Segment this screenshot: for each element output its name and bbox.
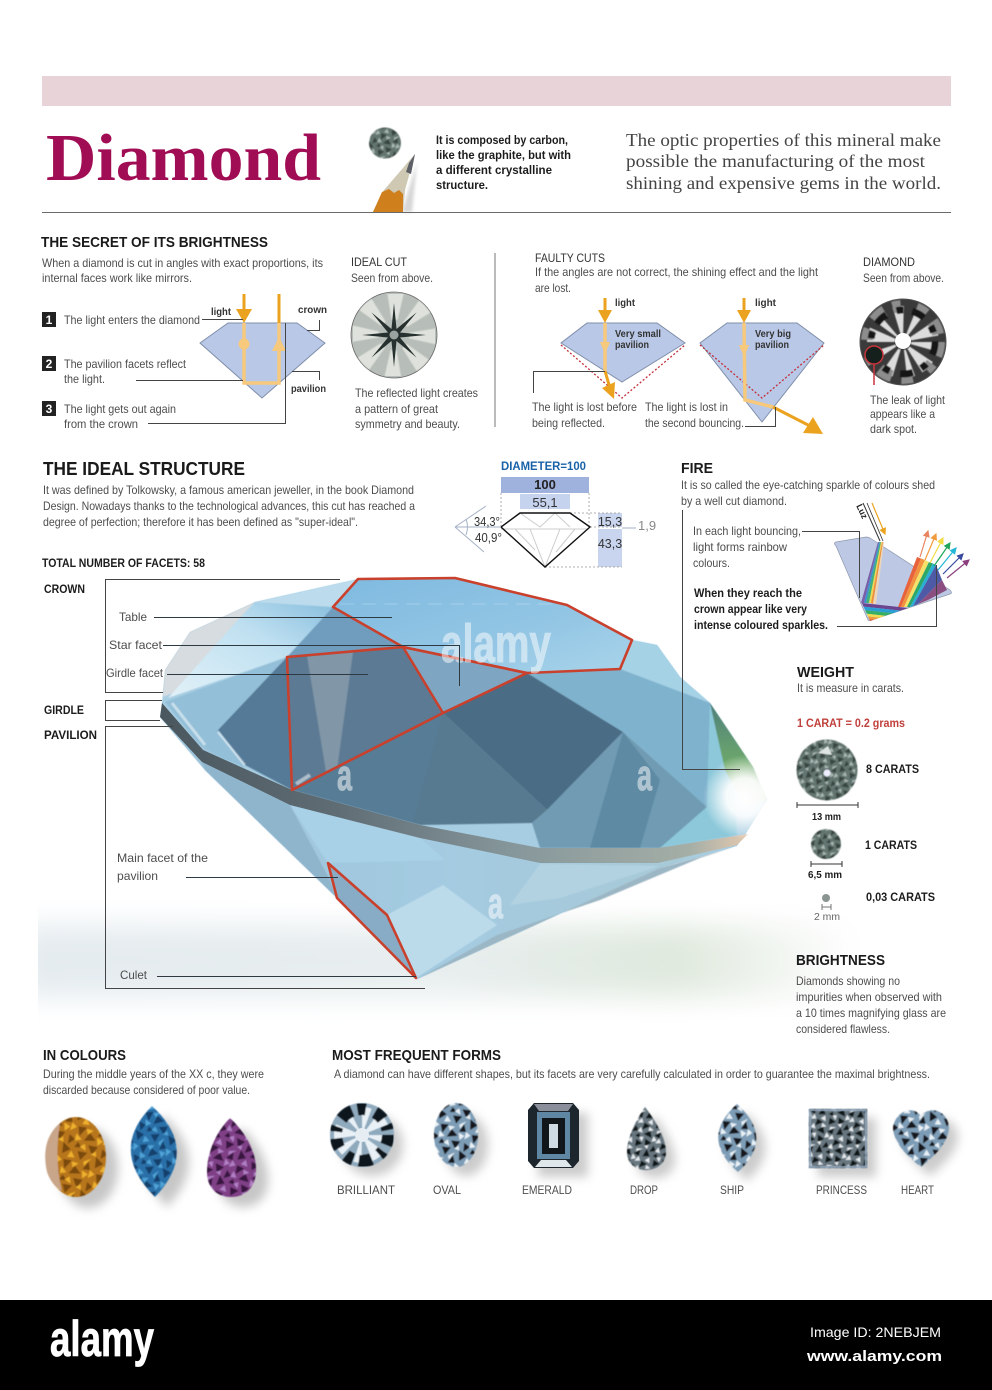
- panel: weight: [796, 664, 935, 923]
- diagram: light path in ideal cut: pavilion: [291, 383, 326, 395]
- callouts: facets: Culet: [120, 968, 148, 982]
- footer bar: alamy: [50, 1311, 154, 1367]
- header band: [42, 76, 951, 106]
- panel: fire: [681, 460, 969, 632]
- intro text: [626, 130, 941, 193]
- diagram: proportions: 100: [534, 477, 556, 492]
- panel: brightness: a 10 times magnifying glass are: [796, 1006, 946, 1020]
- diagram: very small pavilion: pavilion: [615, 339, 649, 351]
- callouts: facets: pavilion: [117, 869, 158, 883]
- intro text: The optic properties of this mineral make: [626, 130, 941, 150]
- carbon note: like the graphite, but with: [436, 148, 571, 162]
- watermark: a: [337, 751, 352, 800]
- form: emerald: [522, 1103, 588, 1197]
- callouts: facets: Table: [119, 610, 147, 624]
- diagram: light path in ideal cut: [136, 294, 327, 424]
- icon: 0.03 carat gem: [822, 894, 830, 902]
- form: ship: [718, 1104, 765, 1197]
- form: ship: SHIP: [720, 1183, 744, 1197]
- diagram: very big pavilion: Very big: [755, 328, 791, 340]
- panel: fire: intense coloured sparkles.: [694, 618, 828, 632]
- callouts: facets: Girdle facet: [106, 666, 164, 680]
- icon: 1 carat gem: [811, 829, 841, 859]
- panel: in colours: During the middle years of the XX c, they were: [43, 1067, 264, 1081]
- panel: diamond seen from above: dark spot.: [870, 422, 917, 436]
- panel: diamond seen from above: Seen from above.: [863, 271, 944, 285]
- diagram: proportions: 34,3°: [474, 514, 500, 529]
- panel: faulty cuts: are lost.: [535, 281, 571, 295]
- form: princess: [809, 1109, 876, 1197]
- callouts: crown, girdle, pavilion: [44, 580, 425, 988]
- diagram: very small pavilion: [532, 297, 685, 430]
- panel: brightness: impurities when observed with: [796, 990, 942, 1004]
- facet count: TOTAL NUMBER OF FACETS: 58: [42, 556, 205, 570]
- icon: 8 carat gem: [796, 740, 858, 800]
- panel: weight: 6,5 mm: [808, 870, 842, 881]
- panel: weight: 1 CARAT = 0.2 grams: [797, 716, 905, 730]
- panel: ideal cut: IDEAL CUT: [351, 255, 408, 269]
- panel: weight: 13 mm: [812, 812, 841, 823]
- step 2: [42, 356, 187, 386]
- panel: in colours: IN COLOURS: [43, 1047, 126, 1064]
- step 2: 2: [46, 357, 53, 371]
- form: brilliant: BRILLIANT: [337, 1183, 396, 1197]
- watermark: alamy: [441, 614, 551, 674]
- intro text: shining and expensive gems in the world.: [626, 173, 941, 193]
- intro text: possible the manufacturing of the most: [626, 151, 925, 171]
- footer bar: [0, 1300, 992, 1390]
- panel: faulty cuts: [532, 251, 824, 434]
- footer bar: www.alamy.com: [806, 1348, 942, 1365]
- background shadow: [20, 925, 860, 997]
- step 2: the light.: [64, 372, 105, 386]
- panel: weight: 0,03 CARATS: [866, 890, 935, 904]
- step 1: The light enters the diamond: [64, 313, 200, 327]
- form: heart: [893, 1110, 958, 1197]
- diagram: very small pavilion: Very small: [615, 328, 661, 340]
- diagram: very big pavilion: the second bouncing.: [645, 416, 744, 430]
- panel: diamond seen from above: DIAMOND: [863, 255, 915, 269]
- panel: ideal cut: a pattern of great: [355, 402, 439, 416]
- footer bar: Image ID: 2NEBJEM: [810, 1324, 941, 1340]
- step 2: The pavilion facets reflect: [64, 357, 187, 371]
- sparkles: [172, 604, 620, 784]
- diagram: proportions: 40,9°: [475, 530, 502, 545]
- panel: faulty cuts: If the angles are not correct, the shining effect and the light: [535, 265, 819, 279]
- panel: in colours: discarded because considered of poor value.: [43, 1083, 250, 1097]
- panel: fire: colours.: [693, 556, 730, 570]
- form: oval: OVAL: [433, 1183, 461, 1197]
- red outlines: [287, 578, 632, 978]
- form: drop: [627, 1107, 675, 1197]
- diagram: light path in ideal cut: light: [211, 306, 231, 318]
- gem: purple drop: [207, 1118, 268, 1207]
- girdle: [160, 703, 748, 863]
- panel: brightness: [796, 952, 946, 1036]
- form: emerald: EMERALD: [522, 1183, 572, 1197]
- panel: diamond seen from above: [860, 255, 946, 436]
- icon: dark spot gem: [860, 299, 946, 385]
- diagram: proportions: 43,3: [598, 537, 622, 551]
- panel: fire: It is so called the eye-catching sparkle of colours shed: [681, 478, 935, 492]
- diagram: very small pavilion: light: [615, 297, 635, 309]
- panel: most frequent forms: MOST FREQUENT FORMS: [332, 1047, 501, 1064]
- carbon note: structure.: [436, 178, 488, 192]
- callouts: crown, girdle, pavilion: PAVILION: [44, 728, 97, 742]
- panel: fire: In each light bouncing,: [693, 524, 801, 538]
- diagram: proportions: DIAMETER=100: [501, 459, 586, 473]
- glow: [703, 755, 787, 839]
- panel: most frequent forms: A diamond can have different shapes, but its facets are very carefully calculated in order to guarantee the maximal brightness.: [334, 1067, 930, 1081]
- panel: brightness: BRIGHTNESS: [796, 952, 885, 969]
- title: Diamond: [46, 121, 321, 195]
- step 3: 3: [46, 402, 53, 416]
- diagram: prism with rainbow: Luz: [854, 502, 870, 521]
- diagram: proportions: 1,9: [638, 518, 656, 533]
- gem: blue marquise: [131, 1106, 189, 1207]
- form: oval: [433, 1103, 488, 1197]
- callouts: crown, girdle, pavilion: CROWN: [44, 582, 85, 596]
- form: heart: HEART: [901, 1183, 935, 1197]
- diagram: very big pavilion: pavilion: [755, 339, 789, 351]
- watermark: a: [488, 879, 503, 928]
- panel: faulty cuts: FAULTY CUTS: [535, 251, 605, 265]
- step 1: 1: [46, 313, 53, 327]
- diagram: light path in ideal cut: crown: [298, 304, 327, 316]
- heading: THE IDEAL STRUCTURE: [43, 459, 245, 479]
- panel: weight: 1 CARATS: [865, 838, 917, 852]
- form: brilliant: [330, 1103, 403, 1197]
- gem: orange oval: [45, 1117, 118, 1208]
- callouts: facets: Star facet: [109, 638, 163, 652]
- panel: diamond seen from above: The leak of light: [870, 393, 946, 407]
- panel: ideal cut: Seen from above.: [351, 271, 433, 285]
- form: princess: PRINCESS: [816, 1183, 867, 1197]
- watermark: a: [637, 751, 652, 800]
- description: Design. Nowadays thanks to the technological advances, this cut has reached a: [43, 499, 415, 513]
- diagram: very small pavilion: The light is lost before: [532, 400, 637, 414]
- intro: internal faces work like mirrors.: [42, 271, 192, 285]
- watermark: [337, 614, 652, 928]
- carbon note: [436, 133, 571, 192]
- panel: most frequent forms: [330, 1047, 958, 1197]
- panel: the secret of its brightness: [41, 234, 327, 431]
- panel: in colours: [43, 1047, 268, 1208]
- description: It was defined by Tolkowsky, a famous american jeweller, in the book Diamond: [43, 483, 414, 497]
- form: drop: DROP: [630, 1183, 658, 1197]
- panel: weight: WEIGHT: [797, 664, 854, 681]
- pavilion: [160, 717, 745, 979]
- panel: fire: light forms rainbow: [693, 540, 787, 554]
- step 3: [42, 401, 176, 431]
- callouts: facets: Main facet of the: [117, 851, 208, 865]
- panel: weight: 8 CARATS: [866, 762, 919, 776]
- diagram: very big pavilion: The light is lost in: [645, 400, 728, 414]
- callouts: crown, girdle, pavilion: GIRDLE: [44, 703, 84, 717]
- panel: ideal cut: [351, 255, 478, 431]
- diagram: very big pavilion: [645, 297, 824, 434]
- panel: brightness: considered flawless.: [796, 1022, 890, 1036]
- panel: fire: crown appear like very: [694, 602, 807, 616]
- crown facets: [163, 578, 767, 848]
- step 3: The light gets out again: [64, 402, 176, 416]
- diagram: proportions: [455, 459, 656, 567]
- diagram: prism with rainbow: [834, 502, 969, 621]
- heading: THE SECRET OF ITS BRIGHTNESS: [41, 234, 268, 251]
- icon: gem and pencil: [369, 128, 417, 212]
- panel: fire: When they reach the: [694, 586, 802, 600]
- carbon note: a different crystalline: [436, 163, 552, 177]
- panel: brightness: Diamonds showing no: [796, 974, 900, 988]
- diagram: very small pavilion: being reflected.: [532, 416, 605, 430]
- description: [43, 483, 415, 529]
- step 3: from the crown: [64, 417, 138, 431]
- panel: ideal structure text: [43, 459, 415, 529]
- description: degree of perfection; therefore it has been defined as "super-ideal".: [43, 515, 358, 529]
- diagram: proportions: 15,3: [598, 515, 622, 529]
- illustration: large diamond: [160, 578, 787, 979]
- intro: [42, 256, 323, 285]
- panel: fire: by a well cut diamond.: [681, 494, 787, 508]
- intro: When a diamond is cut in angles with exact proportions, its: [42, 256, 323, 270]
- carbon note: It is composed by carbon,: [436, 133, 568, 147]
- panel: weight: 2 mm: [814, 912, 840, 923]
- callouts: facets: [106, 610, 460, 982]
- panel: weight: It is measure in carats.: [797, 681, 904, 695]
- diagram: proportions: 55,1: [532, 495, 558, 510]
- panel: ideal cut: symmetry and beauty.: [355, 417, 460, 431]
- diagram: very big pavilion: light: [755, 297, 776, 309]
- panel: diamond seen from above: appears like a: [870, 407, 935, 421]
- panel: fire: FIRE: [681, 460, 713, 477]
- icon: ideal cut gem: [351, 292, 437, 378]
- callout: fire leader line: [682, 510, 740, 770]
- panel: ideal cut: The reflected light creates: [355, 386, 478, 400]
